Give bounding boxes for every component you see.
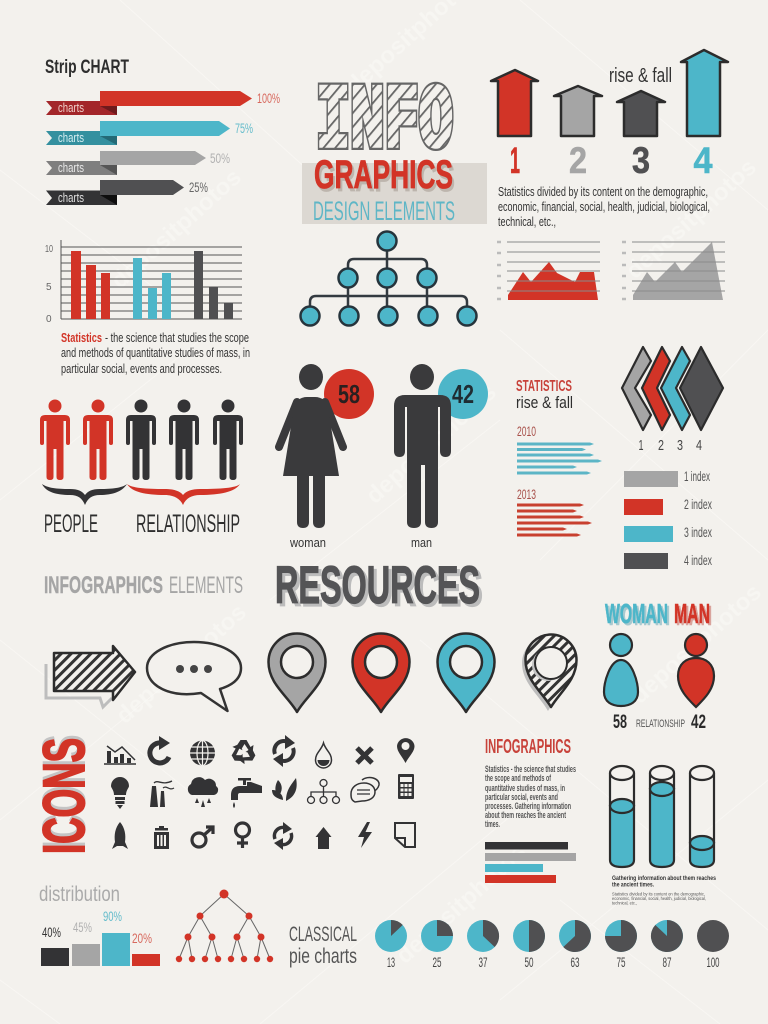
arrow numbers: 2 — [569, 140, 587, 181]
label: relationship: RELATIONSHIP — [136, 510, 240, 538]
arrow numbers — [510, 140, 713, 181]
pie: 75: 75 — [616, 954, 626, 970]
strip: 25% dark — [46, 179, 208, 205]
bar chart: 10 — [45, 244, 53, 255]
heading: statistics: STATISTICS — [516, 378, 572, 395]
pie: 87: 87 — [662, 954, 672, 970]
heading: resources: RESOURCES — [278, 559, 483, 618]
bar: 45%: 45% — [73, 919, 92, 935]
text block: statistics divided: technical, etc., — [498, 214, 556, 229]
heading: woman man: WOMAN — [605, 598, 668, 629]
heading: resources: RESOURCES — [275, 556, 480, 615]
label: man: man — [411, 535, 432, 550]
brace: people — [42, 484, 127, 505]
icon: chat bubbles — [351, 778, 379, 802]
chevron diagram — [622, 347, 723, 430]
heading: classical pie charts: CLASSICAL — [289, 923, 357, 946]
heading: resources — [275, 556, 483, 618]
text block: infographics body: the scope and methods of — [485, 773, 552, 783]
pie: 87 — [651, 920, 683, 970]
heading: icons — [32, 735, 97, 854]
heading: infographics elements: ELEMENTS — [169, 572, 243, 599]
main title — [302, 72, 487, 226]
pie: 25: 25 — [432, 954, 442, 970]
bars — [485, 842, 576, 883]
bar: 40%: 40% — [42, 924, 61, 940]
text block: statistics divided — [498, 184, 710, 229]
badge: 42: 42 — [452, 379, 474, 409]
icon: leaves — [272, 778, 297, 801]
chevron numbers — [638, 437, 702, 454]
strip: 100% red: charts — [58, 100, 84, 115]
pie: 37 — [467, 920, 499, 970]
strip: 50% gray: 50% — [210, 150, 230, 166]
man figure — [394, 364, 488, 550]
icon: sync small — [274, 822, 292, 850]
icon: male — [192, 827, 213, 847]
heading: infographics: INFOGRAPHICS — [485, 736, 571, 758]
heading: strip chart: Strip CHART — [45, 57, 129, 78]
label: 2010: 2010 — [517, 423, 536, 439]
icon: speech bubble — [147, 642, 241, 711]
pie: 37: 37 — [478, 954, 488, 970]
icon: teal person — [604, 634, 638, 706]
cylinder chart — [610, 766, 714, 867]
infographic canvas: depositphotos — [361, 379, 502, 509]
area chart: gray — [622, 242, 725, 300]
panel: strip chart — [45, 57, 280, 205]
icon: female — [236, 823, 250, 848]
pie: 13 — [375, 920, 407, 970]
pin: teal — [438, 634, 494, 712]
pin: gray — [268, 634, 326, 712]
strip: 100% red — [46, 90, 280, 115]
icon: lightning — [358, 822, 372, 848]
chevron 1 — [622, 347, 651, 430]
icon: note — [395, 823, 415, 847]
heading: infographics elements: INFOGRAPHICS — [44, 572, 163, 599]
strip: 100% red: 100% — [257, 90, 280, 106]
title: INFO — [316, 72, 453, 174]
caption: cylinder chart — [612, 875, 716, 906]
heading: icons: ICONS — [32, 735, 97, 851]
strip: 75% teal: charts — [58, 130, 84, 145]
caption: cylinder chart: Gathering information about them reaches — [612, 875, 716, 882]
relationship figures: 42 — [691, 712, 706, 733]
brace: relationship — [127, 484, 240, 505]
pie: 63 — [559, 920, 591, 970]
heading: woman man: MAN — [674, 598, 710, 629]
strip: 25% dark: charts — [58, 190, 84, 205]
heading: classical pie charts — [289, 923, 357, 968]
label: 2013: 2013 — [517, 486, 536, 502]
icon: rocket — [112, 822, 128, 849]
icon: refresh — [150, 736, 170, 763]
bar: 90%: 90% — [103, 908, 122, 924]
icon: drop — [316, 743, 332, 768]
chevron 3 — [661, 347, 690, 430]
icon: calculator — [398, 774, 414, 799]
bar: 20%: 20% — [132, 930, 152, 946]
diamond 4 — [680, 347, 723, 430]
label: woman: woman — [289, 535, 326, 550]
pie: 100 — [697, 920, 729, 970]
cylinder 2 — [650, 766, 674, 867]
chevron numbers: 1 — [638, 437, 644, 454]
arrow 4 — [681, 50, 728, 136]
title: GRAPHICS: GRAPHICS — [314, 153, 453, 197]
bar chart: 5 — [46, 282, 52, 293]
icon: light bulb — [111, 777, 129, 809]
icon: bar chart down — [104, 746, 136, 764]
person dark 1 — [126, 400, 156, 480]
arrow 3 — [617, 91, 665, 136]
arrow numbers: 1 — [510, 140, 520, 181]
person red 2 — [83, 400, 113, 480]
caption: cylinder chart: Statistics divided by its content on the demographic, — [612, 892, 705, 896]
relationship figures: RELATIONSHIP — [636, 718, 685, 730]
heading: woman man: MAN — [676, 600, 712, 631]
area chart: red — [497, 242, 600, 300]
chevron numbers: 2 — [658, 437, 664, 454]
text block: infographics body: processes. Gathering information — [485, 801, 571, 811]
text block: statistics definition: Statistics — [61, 330, 102, 345]
pin: red — [352, 634, 410, 712]
infographic canvas: depositphotos — [391, 839, 532, 969]
text block: infographics body: Statistics - the science that studies — [485, 764, 576, 774]
cylinder 1 — [610, 766, 634, 867]
person dark 3 — [213, 400, 243, 480]
caption: cylinder chart: technical, etc., — [612, 900, 637, 906]
pin: hatched — [522, 635, 576, 711]
person dark 2 — [169, 400, 199, 480]
strip: 75% teal — [46, 120, 253, 145]
pie: 25 — [421, 920, 453, 970]
infographic canvas: depositphotos — [626, 579, 767, 709]
pie: 50 — [513, 920, 545, 970]
label: rise and fall: rise & fall — [609, 65, 672, 87]
icon: globe — [190, 740, 215, 766]
person red 1 — [40, 400, 70, 480]
icon: factory — [150, 781, 174, 807]
legend: index — [624, 469, 712, 569]
title: INFO: INFO — [316, 72, 453, 174]
text block: statistics definition — [61, 330, 250, 376]
heading: woman man: WOMAN — [607, 600, 670, 631]
pie: 75 — [605, 920, 637, 970]
icon: up arrow — [316, 827, 332, 849]
icon: trash — [154, 826, 169, 849]
strip: 50% gray — [46, 150, 230, 175]
legend: index: 2 index — [684, 497, 712, 512]
infographic canvas: depositphotos — [106, 164, 247, 294]
pie: 63: 63 — [570, 954, 580, 970]
infographic canvas: depositphotos — [621, 154, 762, 284]
pie: 13: 13 — [387, 954, 395, 970]
panel: infographics text and bars — [485, 736, 576, 883]
icon: recycle — [228, 740, 257, 767]
panel: distribution — [39, 883, 160, 966]
legend: index: 4 index — [684, 553, 712, 568]
text block: statistics definition: and methods of quantitative studies of mass, in — [61, 345, 250, 360]
title: design elements: DESIGN ELEMENTS — [313, 196, 455, 226]
cylinder 3 — [690, 766, 714, 867]
label: people: PEOPLE — [44, 510, 98, 538]
icon: sync — [273, 735, 295, 767]
strip: 75% teal: 75% — [235, 120, 253, 136]
icon: red person — [678, 634, 714, 707]
icon: network — [308, 780, 340, 804]
org tree — [300, 232, 476, 326]
legend: index: 1 index — [684, 469, 710, 484]
chevron numbers: 4 — [696, 437, 702, 454]
icon: woman — [279, 364, 343, 528]
heading: classical pie charts: pie charts — [289, 945, 357, 968]
title: INFO: INFO — [316, 72, 453, 174]
caption: cylinder chart: the ancient times. — [612, 882, 654, 888]
woman figure — [279, 364, 374, 550]
chevron 2 — [642, 347, 670, 430]
text block: infographics body: quantitative studies of mass, in — [485, 783, 565, 793]
icon: hatched arrow — [46, 646, 135, 707]
arrow numbers: 3 — [632, 140, 650, 181]
title backdrop — [302, 163, 487, 224]
infographic canvas: depositphotos — [111, 599, 252, 729]
pie: 100: 100 — [706, 954, 720, 970]
bar chart — [45, 240, 242, 325]
icon: cross — [357, 748, 372, 763]
icon: man — [394, 364, 451, 528]
panel: statistics rise and fall — [516, 378, 602, 536]
text block: infographics body — [485, 764, 576, 829]
text block: infographics body: times. — [485, 819, 500, 829]
people row — [40, 400, 243, 480]
heading: distribution: distribution — [39, 883, 120, 906]
icon: rain cloud — [188, 777, 218, 807]
title: GRAPHICS — [314, 153, 455, 200]
relationship figures: 58 — [613, 712, 627, 733]
caption: cylinder chart: economic, financial, social, health, judicial, biological, — [612, 896, 706, 901]
badge: 42 — [438, 369, 488, 419]
icon: map pin — [397, 738, 414, 763]
relationship figures — [613, 712, 706, 733]
chevron numbers: 3 — [677, 437, 683, 454]
heading: rise and fall: rise & fall — [516, 393, 573, 412]
arrows: 2010 — [517, 442, 602, 474]
text block: infographics body: particular social, events and — [485, 792, 558, 802]
binary tree — [176, 890, 273, 962]
strip: 50% gray: charts — [58, 160, 84, 175]
heading: icons: ICONS — [32, 738, 97, 854]
arrow 1 — [491, 70, 538, 136]
arrows: rise and fall — [491, 50, 728, 136]
arrows: 2013 — [517, 504, 592, 536]
arrow numbers: 4 — [694, 140, 713, 181]
strip: 25% dark: 25% — [189, 179, 208, 195]
icon: faucet — [231, 778, 262, 808]
legend: index: 3 index — [684, 525, 712, 540]
badge: 58: 58 — [338, 379, 360, 409]
pie: 50: 50 — [524, 954, 534, 970]
arrow 2 — [554, 86, 602, 136]
icon grid — [104, 735, 415, 850]
title: GRAPHICS: GRAPHICS — [316, 156, 455, 200]
text block: infographics body: about them reaches the ancient — [485, 810, 566, 820]
text block: statistics definition: particular social, events and processes. — [61, 361, 222, 376]
bar chart: 0 — [46, 314, 52, 325]
text block: statistics definition: - the science that studies the scope — [105, 330, 249, 345]
badge: 58 — [324, 369, 374, 419]
pie charts — [375, 920, 729, 970]
